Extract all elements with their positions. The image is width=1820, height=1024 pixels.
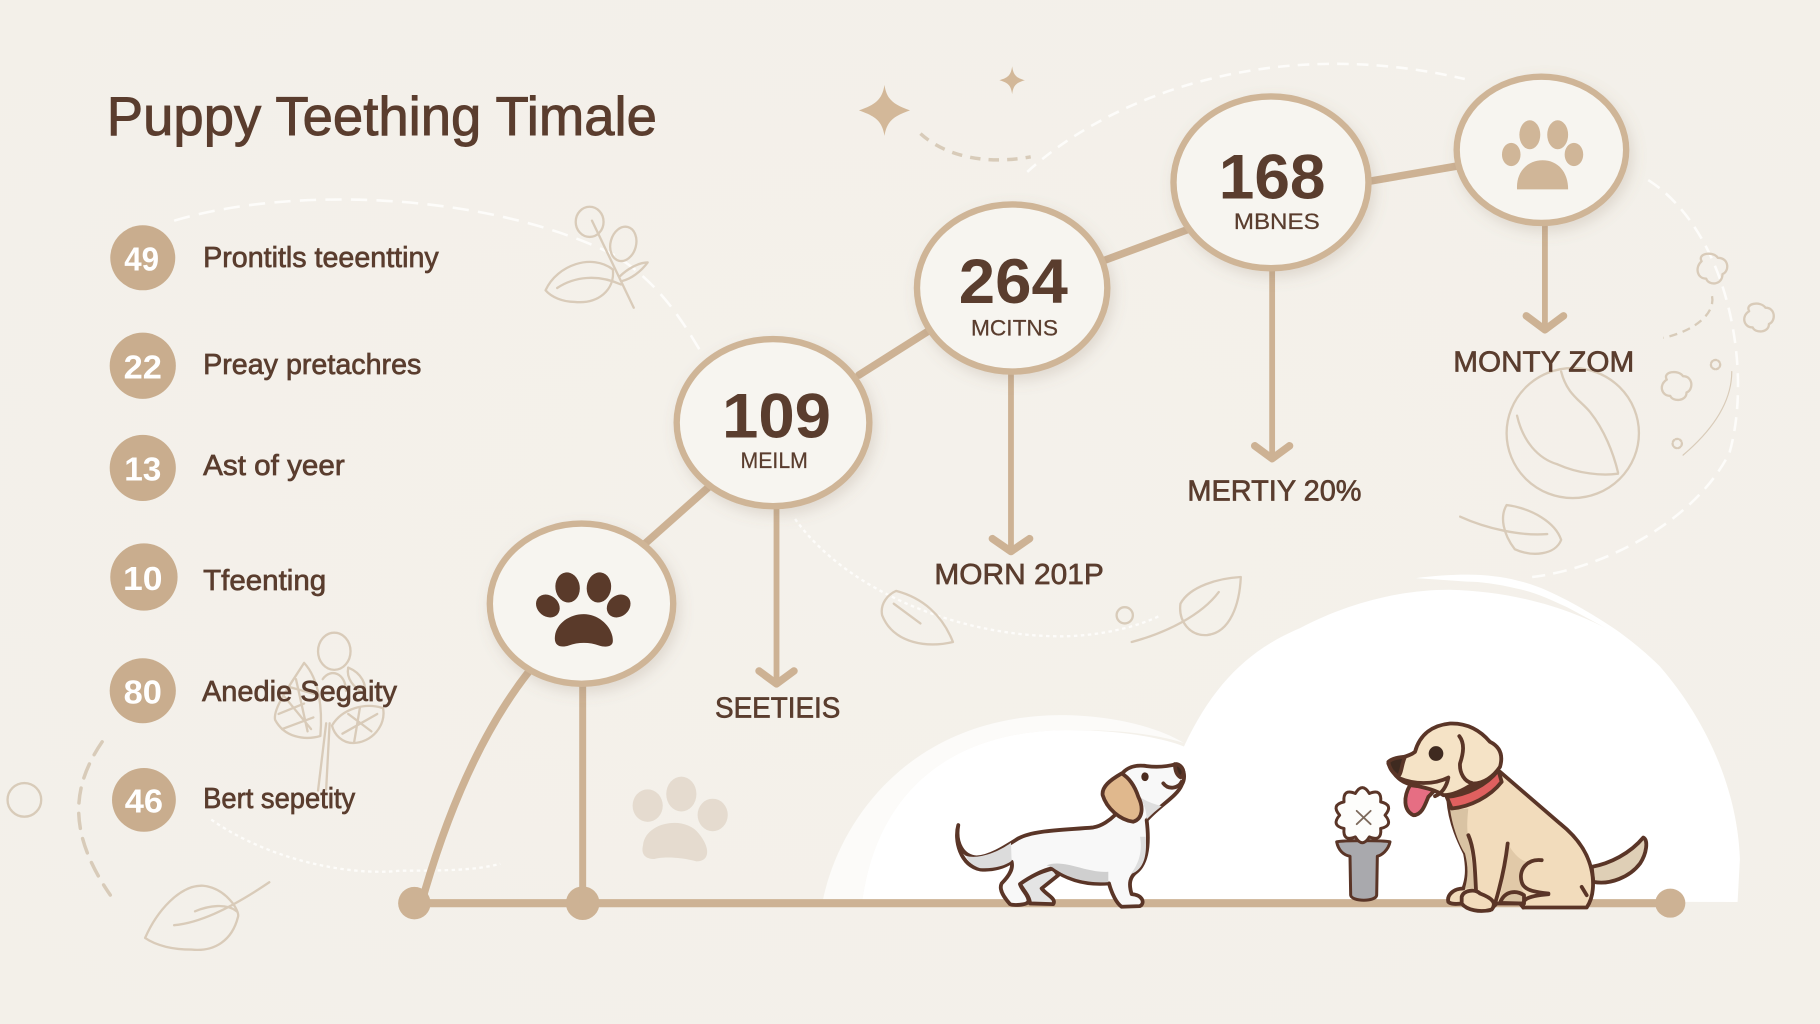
list item 6: Bert sepetity <box>203 783 356 815</box>
timeline node: 264: MCITNS <box>971 316 1058 341</box>
list item 4: Tfeenting <box>203 565 326 597</box>
decoration: small circle left <box>8 783 41 817</box>
timeline node: dark paw <box>490 524 673 684</box>
timeline baseline <box>398 886 1685 920</box>
decoration: leaf middle right <box>1132 577 1241 642</box>
list item 4: 10 <box>123 561 162 598</box>
arrow: final paw <box>1526 225 1563 330</box>
list item 2: 22 <box>124 350 162 387</box>
list item 2 <box>110 333 421 399</box>
list item 4 <box>110 543 326 611</box>
white dashed path: top left <box>174 199 702 354</box>
stem: first node <box>580 679 586 903</box>
timeline node: 168: MBNES <box>1234 209 1320 234</box>
tan dashed path: near star <box>920 134 1031 160</box>
list item 5: Anedie Segaity <box>202 676 397 708</box>
label: MONTY ZOM: MONTY ZOM <box>1453 347 1634 379</box>
white dashed path: right <box>1532 180 1738 577</box>
timeline node: 168 <box>1173 96 1368 268</box>
label: MERTIY 20%: MERTIY 20% <box>1187 475 1362 507</box>
timeline node: 109: 109 <box>722 382 831 452</box>
arrow: month 168 <box>1255 269 1290 459</box>
tan dashed path: left <box>79 742 110 895</box>
decoration: leaf bottom left <box>145 882 269 950</box>
decoration: leaf sprig top <box>546 207 648 308</box>
timeline node: tan paw <box>1457 77 1626 223</box>
decoration: small circle middle <box>1117 607 1133 623</box>
label: SEETIEIS: SEETIEIS <box>715 692 840 724</box>
list item 6: 46 <box>125 784 163 821</box>
icon: large star <box>859 85 910 136</box>
list item 1: 49 <box>124 242 159 279</box>
arrow: month 264 <box>992 372 1030 551</box>
illustration: chew toy <box>1336 788 1390 900</box>
timeline node: 264: 264 <box>959 247 1068 317</box>
timeline node: 109 <box>677 339 869 506</box>
list item 3: 13 <box>124 452 161 489</box>
tan dashed path: right flowers <box>1663 296 1712 338</box>
white hills backdrop <box>823 575 1740 902</box>
label: MORN 201P: MORN 201P <box>934 559 1104 591</box>
decoration: floral sprig behind list <box>275 633 384 791</box>
decoration: faint paw print <box>633 777 728 861</box>
list item 1 <box>110 225 439 290</box>
list item 5 <box>110 658 397 723</box>
timeline node: 264 <box>917 204 1107 372</box>
list item 3: Ast of yeer <box>203 450 345 482</box>
list item 2: Preay pretachres <box>203 349 421 381</box>
timeline node: 109: MEILM <box>741 448 808 473</box>
decoration: leaf middle left <box>882 591 953 644</box>
timeline curve and connectors <box>421 166 1457 903</box>
white dotted path: bottom left <box>211 820 500 872</box>
illustration: sitting tan dog <box>1388 723 1646 911</box>
list item 3 <box>110 435 345 501</box>
decoration: flowers right <box>1662 254 1774 455</box>
white dashed path: top right <box>1027 64 1465 172</box>
list item 6 <box>112 768 356 832</box>
timeline node: 168: 168 <box>1219 143 1326 213</box>
list item 1: Prontitls teeenttiny <box>203 242 439 274</box>
illustration: small white puppy <box>957 764 1184 907</box>
title: Puppy Teething Timale <box>107 86 657 147</box>
decoration: ball <box>1507 368 1639 498</box>
icon: small star <box>999 66 1025 94</box>
list item 5: 80 <box>124 675 162 712</box>
decoration: leaf right <box>1460 505 1561 554</box>
arrow: month 109 <box>759 506 794 684</box>
white dotted path: middle <box>795 519 1161 636</box>
